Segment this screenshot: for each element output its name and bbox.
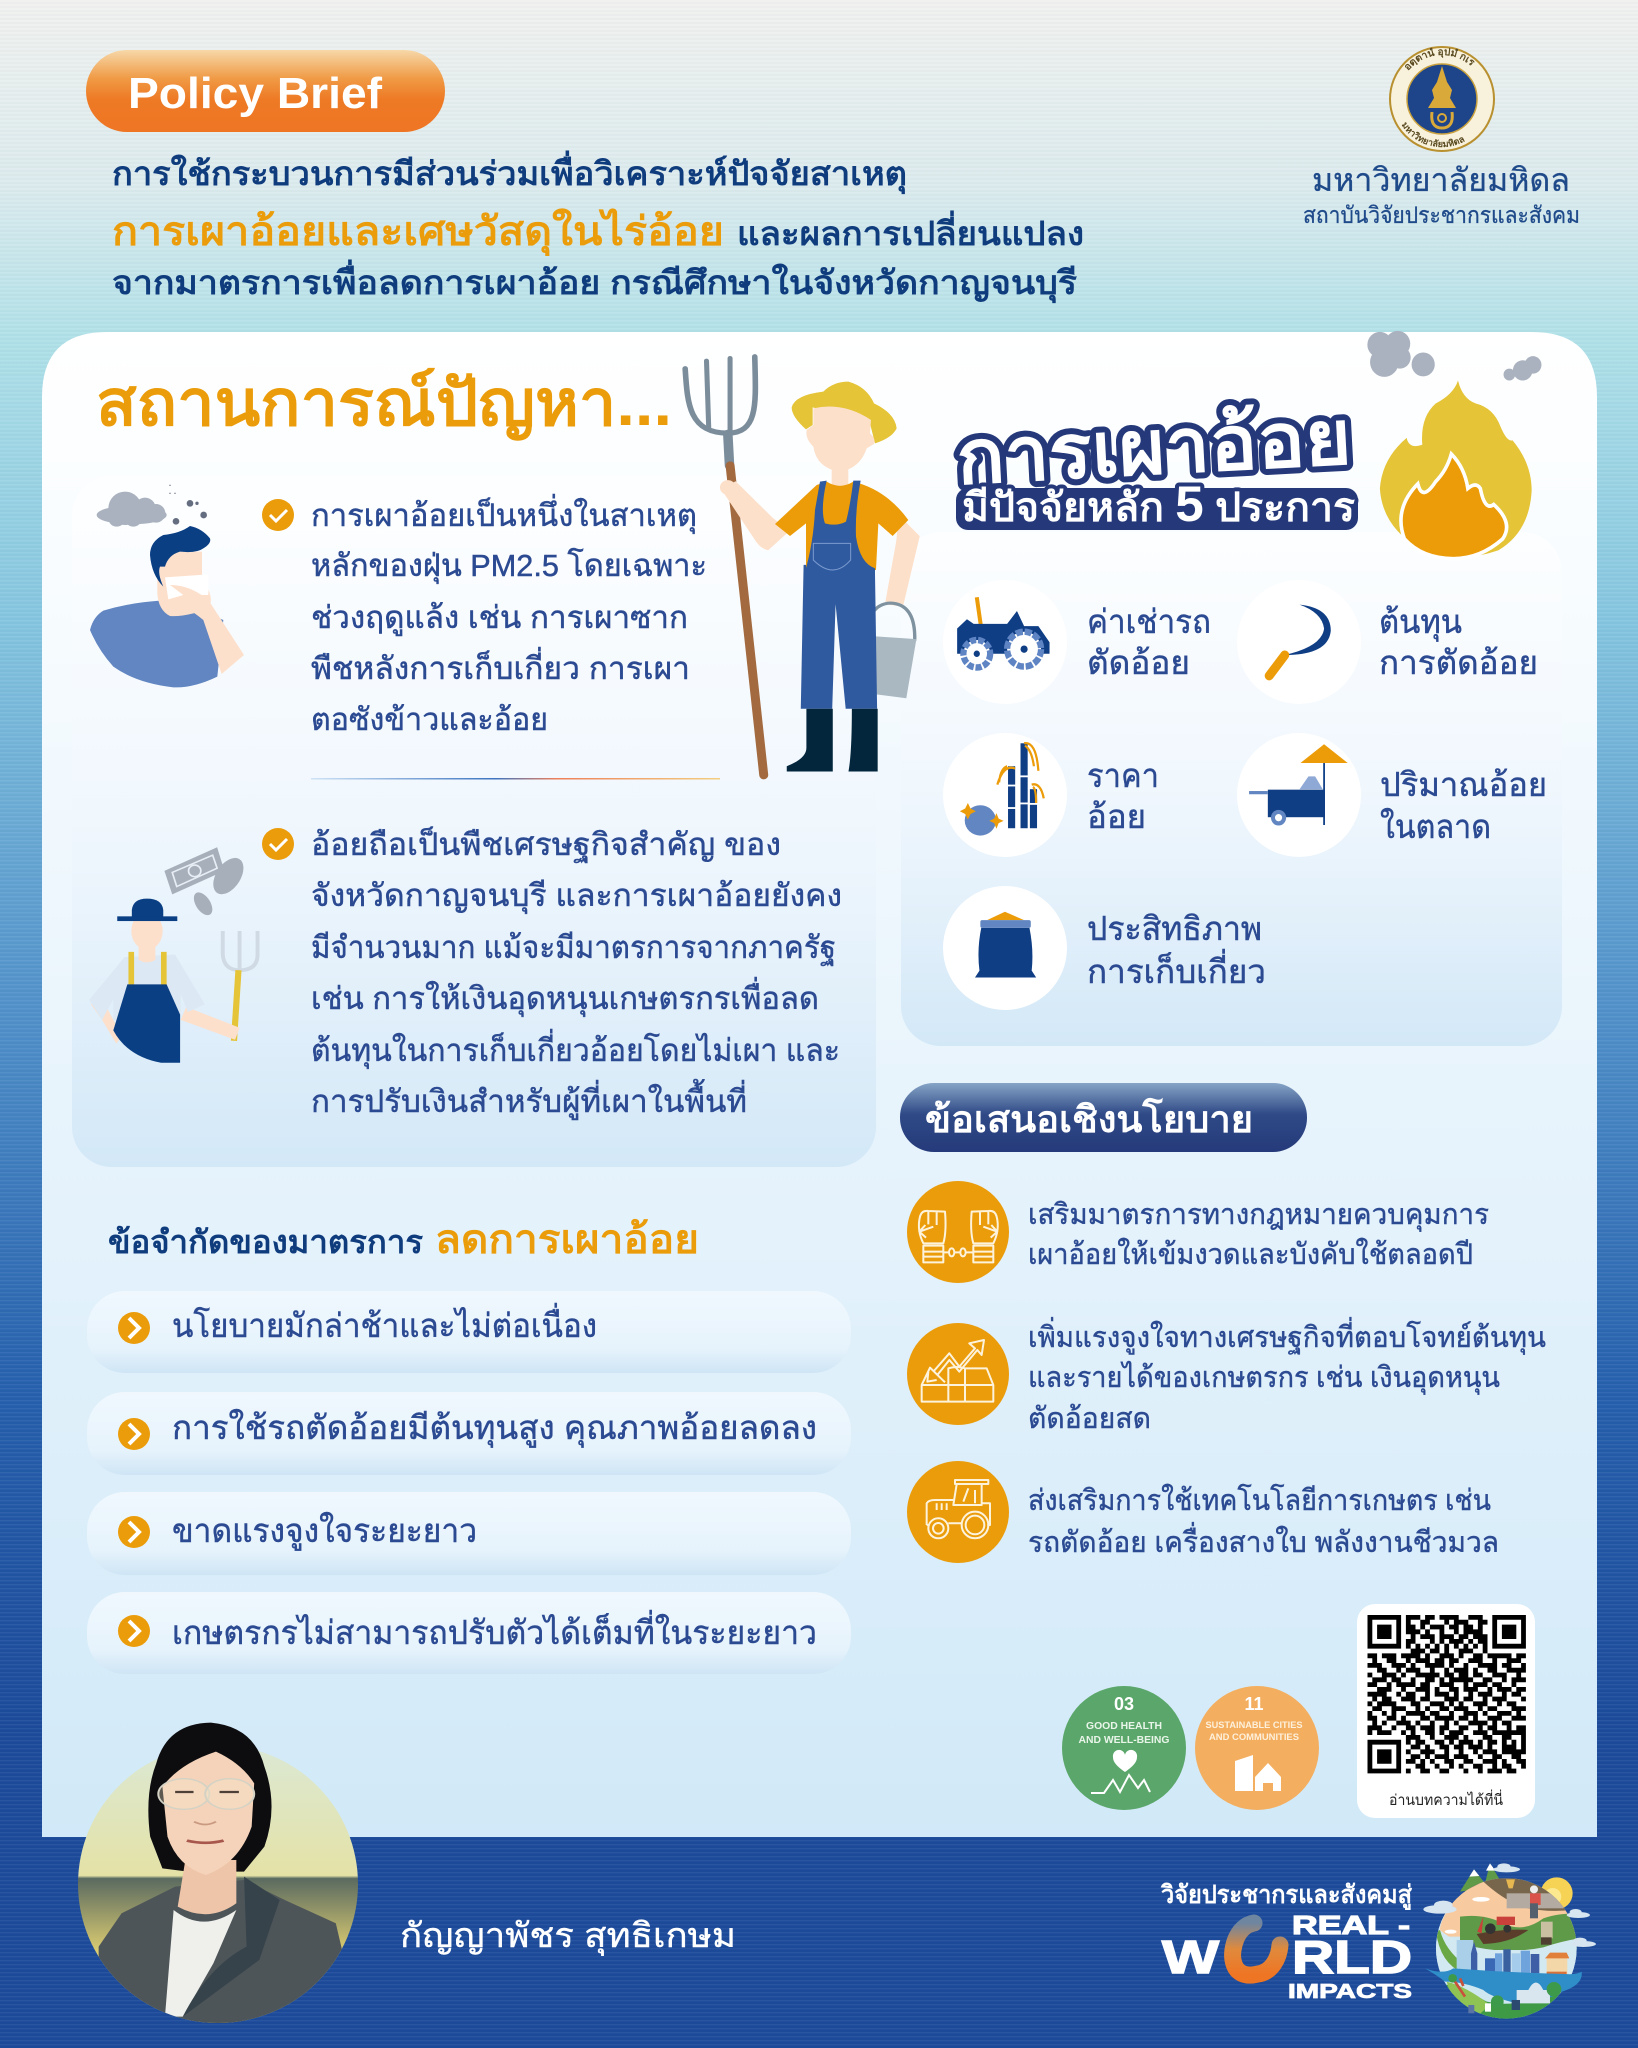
illustration: man covering nose under smoke <box>90 485 244 687</box>
shirt <box>90 601 223 687</box>
panel: situation sub-panel <box>72 476 876 1167</box>
upper scene <box>1444 1878 1568 1916</box>
QR card <box>1357 1604 1535 1818</box>
icon: tractor outline <box>927 1480 990 1538</box>
factor 2: cost <box>1237 580 1538 704</box>
icon: university seal <box>1389 46 1495 152</box>
illustration: farmer with pitchfork <box>685 357 920 775</box>
recommendation 3: ส่งเสริมการใช้เทคโนโลยีการเกษตร เช่น <box>1028 1483 1491 1517</box>
text: situation paragraph 2: จังหวัดกาญจนบุรี และการเผาอ้อยยังคง <box>311 878 842 915</box>
logo: Real-World Impacts: วิจัยประชากรและสังคมสู่ <box>1160 1881 1413 1911</box>
badge: Policy Brief: Policy Brief <box>128 69 382 118</box>
badge: SDG 11 <box>1195 1686 1319 1810</box>
heading pill: policy recommendations: ข้อเสนอเชิงนโยบาย <box>925 1097 1253 1140</box>
logo: Real-World Impacts: RLD <box>1292 1931 1412 1983</box>
factor 2: cost: ต้นทุน <box>1379 603 1462 642</box>
lower land <box>1446 1984 1559 2019</box>
list: limitations <box>87 1291 851 1674</box>
portrait <box>78 1723 358 2027</box>
recommendation 1 <box>907 1181 1489 1283</box>
icon: fists and chain <box>919 1211 998 1262</box>
factor 4: quantity: ปริมาณอ้อย <box>1380 766 1547 803</box>
money <box>164 847 250 918</box>
heading: burning has 5 factors: มีปัจจัยหลัก 5 ประการ <box>962 476 1356 532</box>
factor 5: efficiency <box>943 886 1266 1010</box>
limitation 3 <box>87 1492 851 1575</box>
illustration: farmer with money <box>89 847 258 1063</box>
limitation 1: นโยบายมักล่าช้าและไม่ต่อเนื่อง <box>172 1303 597 1344</box>
shirt <box>775 482 908 570</box>
text: situation paragraph 2 <box>311 826 842 1120</box>
badge: SDG 3: GOOD HEALTH <box>1086 1721 1162 1732</box>
icon: sickle <box>1269 605 1331 676</box>
limitation 4 <box>87 1592 851 1674</box>
text: situation paragraph 1: หลักของฝุ่น PM2.5 โดยเฉพาะ <box>311 548 707 585</box>
hair <box>148 1723 272 1872</box>
icon: sugarcane <box>960 743 1044 836</box>
recommendation 2: และรายได้ของเกษตรกร เช่น เงินอุดหนุน <box>1028 1360 1500 1395</box>
recommendation 1: เผาอ้อยให้เข้มงวดและบังคับใช้ตลอดปี <box>1028 1237 1473 1271</box>
recommendation 2 <box>907 1317 1546 1435</box>
heading: limitations: ข้อจำกัดของมาตรการ <box>108 1224 423 1260</box>
text: situation paragraph 1: ช่วงฤดูแล้ง เช่น การเผาซาก <box>311 600 688 636</box>
badge: SDG 3: 03 <box>1114 1694 1134 1714</box>
factor 3: price: ราคา <box>1087 757 1159 794</box>
heading: limitations <box>108 1218 699 1262</box>
smoke cloud <box>97 492 167 527</box>
title: และผลการเปลี่ยนแปลง <box>737 210 1084 252</box>
mountains <box>1460 1863 1500 1892</box>
panel: main content <box>42 332 1597 1837</box>
icon: university seal: อตฺตานํ อุปมํ กเร <box>1405 48 1475 70</box>
logo: Real-World Impacts: IMPACTS <box>1288 1981 1412 2003</box>
icon: check 2 <box>262 828 294 860</box>
QR code <box>1368 1615 1526 1773</box>
factor 1: rental: ตัดอ้อย <box>1087 644 1190 681</box>
sun <box>1541 1877 1573 1909</box>
badge: SDG 11: 11 <box>1244 1694 1264 1714</box>
title: การใช้กระบวนการมีส่วนร่วมเพื่อวิเคราะห์ปัจจัยสาเหตุ <box>112 150 907 195</box>
icon: orange O <box>1233 1923 1280 1975</box>
recommendation 2: ตัดอ้อยสด <box>1028 1403 1151 1435</box>
logo: Real-World Impacts <box>1160 1881 1413 2003</box>
factor 3: price: อ้อย <box>1087 798 1146 835</box>
face <box>157 552 211 616</box>
bib <box>805 481 875 572</box>
fork <box>223 931 258 970</box>
badge: SDG 3: AND WELL-BEING <box>1078 1735 1170 1746</box>
neck and shirt <box>165 1910 236 2017</box>
logo: Mahidol University <box>1303 46 1580 228</box>
text: situation paragraph 2: อ้อยถือเป็นพืชเศรษฐกิจสำคัญ ของ <box>311 826 781 863</box>
text: situation paragraph 1: พืชหลังการเก็บเกี่ยว การเผา <box>311 647 690 686</box>
factor 4: quantity <box>1237 733 1547 857</box>
logo: Mahidol University: สถาบันวิจัยประชากรและสังคม <box>1303 202 1580 228</box>
title: การเผาอ้อยและเศษวัสดุในไร่อ้อย <box>112 208 724 257</box>
limitation 2: การใช้รถตัดอ้อยมีต้นทุนสูง คุณภาพอ้อยลดลง <box>172 1409 817 1448</box>
factor 1: rental <box>943 580 1211 704</box>
overall legs <box>801 565 877 709</box>
lake <box>1425 1968 1582 2003</box>
text: situation paragraph 1 <box>311 494 707 737</box>
text: situation paragraph 2: มีจำนวนมาก แม้จะมีมาตรการจากภาครัฐ <box>311 930 836 966</box>
limitation 4: เกษตรกรไม่สามารถปรับตัวได้เต็มที่ในระยะยาว <box>172 1610 817 1651</box>
icon: money and rising arrow <box>922 1340 993 1402</box>
logo: Mahidol University: มหาวิทยาลัยมหิดล <box>1312 162 1570 198</box>
face <box>806 407 874 472</box>
city <box>1457 1940 1473 1970</box>
author name: กัญญาพัชร สุทธิเกษม <box>400 1917 736 1956</box>
clouds <box>1423 1863 1596 1947</box>
panel: five factors sub-panel <box>901 532 1562 1046</box>
jacket <box>99 1880 346 2027</box>
text: situation paragraph 1: ตอซังข้าวและอ้อย <box>311 702 548 737</box>
boots <box>787 709 833 771</box>
factor 2: cost: การตัดอ้อย <box>1379 644 1538 681</box>
icon: cart <box>1249 744 1348 825</box>
text: situation paragraph 2: การปรับเงินสำหรับผู้ที่เผาในพื้นที่ <box>311 1079 747 1120</box>
factor 5: efficiency: ประสิทธิภาพ <box>1087 910 1262 947</box>
text: situation paragraph 1: การเผาอ้อยเป็นหนึ่งในสาเหตุ <box>311 494 697 535</box>
hat <box>792 382 897 443</box>
factor 4: quantity: ในตลาด <box>1380 808 1491 845</box>
title <box>112 150 1084 304</box>
recommendation 3 <box>907 1461 1499 1563</box>
icon: bucket <box>864 603 916 698</box>
badge: SDG 11: AND COMMUNITIES <box>1209 1732 1299 1743</box>
heading: limitations: ลดการเผาอ้อย <box>435 1218 699 1262</box>
badge: Policy Brief <box>86 50 445 132</box>
icon: university seal: มหาวิทยาลัยมหิดล <box>1402 122 1465 148</box>
recommendation 1: เสริมมาตรการทางกฎหมายควบคุมการ <box>1028 1199 1489 1232</box>
recommendation 2: เพิ่มแรงจูงใจทางเศรษฐกิจที่ตอบโจทย์ต้นทุน <box>1028 1317 1546 1355</box>
hair <box>150 526 210 587</box>
QR card: อ่านบทความได้ที่นี่ <box>1389 1789 1503 1809</box>
illustration: globe <box>1423 1863 1596 2020</box>
recommendation 3: รถตัดอ้อย เครื่องสางใบ พลังงานชีวมวล <box>1028 1522 1499 1559</box>
limitation 1 <box>87 1291 851 1373</box>
museum and trees <box>1517 1982 1550 2003</box>
icon: fire and smoke <box>1367 331 1541 559</box>
neck <box>178 1860 236 1914</box>
logo: Real-World Impacts: REAL - <box>1292 1910 1410 1940</box>
factor 3: price <box>943 733 1159 857</box>
face <box>162 1752 254 1875</box>
icon: pitchfork <box>685 357 764 775</box>
text: situation paragraph 2: ต้นทุนในการเก็บเกี่ยวอ้อยโดยไม่เผา และ <box>311 1029 840 1070</box>
badge: SDG 11: SUSTAINABLE CITIES <box>1206 1720 1302 1731</box>
logo: Real-World Impacts: W <box>1162 1931 1220 1983</box>
factor 5: efficiency: การเก็บเกี่ยว <box>1087 949 1266 990</box>
icon: check 1 <box>262 499 294 531</box>
icon: sack <box>975 912 1036 977</box>
badge: SDG 3 <box>1062 1686 1186 1810</box>
limitation 2 <box>87 1392 851 1475</box>
shirt and arms <box>181 1007 240 1040</box>
text: situation paragraph 2: เช่น การให้เงินอุดหนุนเกษตรกรเพื่อลด <box>311 977 819 1018</box>
limitation 3: ขาดแรงจูงใจระยะยาว <box>172 1512 477 1551</box>
swoosh <box>1436 1914 1577 1974</box>
icon: tractor <box>957 597 1050 668</box>
heading: burning has 5 factors: การเผาอ้อย <box>954 395 1353 501</box>
mask <box>165 574 208 599</box>
heading pill: policy recommendations <box>900 1083 1307 1152</box>
factor 1: rental: ค่าเช่ารถ <box>1087 603 1211 640</box>
title: จากมาตรการเพื่อลดการเผาอ้อย กรณีศึกษาในจังหวัดกาญจนบุรี <box>112 259 1077 304</box>
arm <box>180 594 244 674</box>
heading: situation: สถานการณ์ปัญหา... <box>96 367 672 440</box>
